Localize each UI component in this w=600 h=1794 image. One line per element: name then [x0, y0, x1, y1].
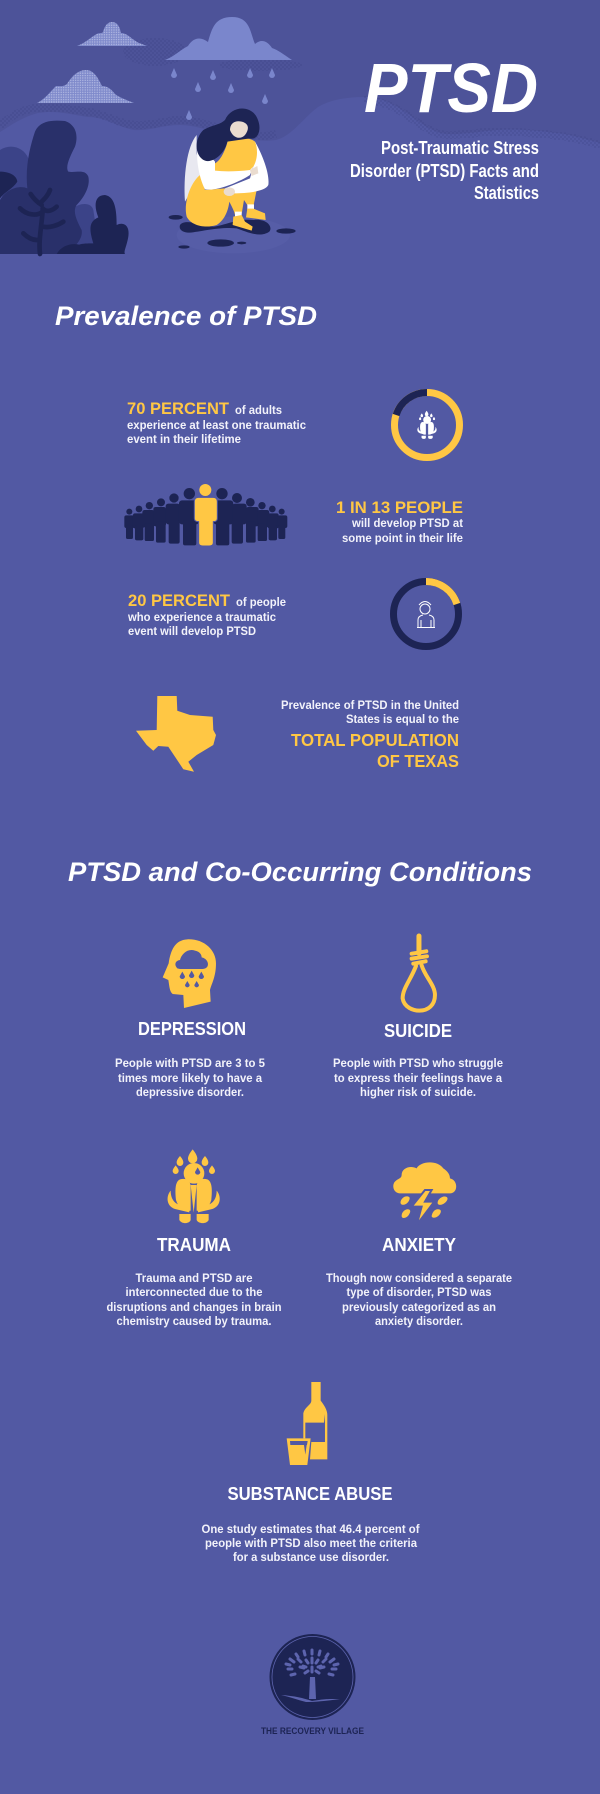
hill stipple [0, 107, 276, 135]
socks [235, 204, 254, 217]
heading: co-occurring conditions: PTSD and Co-Occurring Conditions [68, 857, 532, 887]
anxiety text: previously categorized as an [342, 1300, 496, 1314]
boots [233, 209, 266, 231]
anxiety text: anxiety disorder. [375, 1314, 463, 1328]
highlighted yellow person [194, 497, 217, 546]
depression text [115, 1056, 265, 1099]
icon: person outline [417, 602, 435, 628]
stat: 20 percent: of people [236, 595, 286, 609]
large rain cloud [165, 17, 292, 60]
front right leaf [68, 195, 129, 254]
dark crowd [124, 488, 287, 545]
stat: 70 percent: of adults [235, 403, 282, 417]
icon: brain white [417, 411, 437, 439]
shadow [180, 220, 270, 235]
back bush left [0, 147, 30, 197]
stat: 70 percent [127, 399, 306, 446]
stat: 20 percent: event will develop PTSD [128, 624, 256, 638]
leaf veins [20, 190, 63, 254]
stat: 20 percent: who experience a traumatic [127, 610, 276, 624]
hills backdrop [0, 0, 600, 143]
logo wordmark: THE RECOVERY VILLAGE [261, 1726, 364, 1737]
torso [215, 138, 257, 171]
trauma text [106, 1271, 282, 1328]
ground stipple [177, 217, 290, 253]
stat: 1 in 13 people [336, 498, 463, 545]
front left dark leaf [0, 172, 17, 198]
middle cloud [37, 70, 134, 103]
depression text: People with PTSD are 3 to 5 [115, 1056, 265, 1070]
face [230, 121, 248, 138]
icon: storm cloud [393, 1162, 456, 1225]
trauma text: chemistry caused by trauma. [116, 1314, 272, 1328]
logo [261, 1634, 364, 1737]
ground patches [169, 215, 296, 249]
small cloud [77, 22, 147, 46]
suicide text: People with PTSD who struggle [333, 1056, 503, 1070]
suicide text [333, 1056, 503, 1099]
trauma title: TRAUMA [157, 1235, 231, 1255]
suicide text: to express their feelings have a [334, 1071, 502, 1085]
header illustration [0, 0, 600, 254]
cloud stipple [123, 38, 187, 66]
donut: 70 percent [394, 392, 460, 458]
suicide text: higher risk of suicide. [360, 1085, 476, 1099]
yellow head [199, 484, 211, 496]
stat: 70 percent: experience at least one traumatic [127, 418, 306, 432]
sweater left [197, 143, 253, 190]
back bush right [63, 204, 100, 254]
icon: brain with drops [168, 1149, 220, 1223]
hands [250, 166, 258, 176]
subtitle: Statistics [474, 183, 539, 203]
depression text: depressive disorder. [136, 1085, 244, 1099]
ground bump [57, 244, 93, 254]
anxiety text: Though now considered a separate [326, 1271, 512, 1285]
panel: trauma [106, 1149, 282, 1328]
subtitle: Disorder (PTSD) Facts and [350, 161, 539, 181]
sweater right arm [225, 142, 269, 193]
icon: head with rain cloud [163, 939, 216, 1008]
anxiety text [326, 1271, 512, 1328]
sitting woman [169, 109, 296, 253]
substance text: for a substance use disorder. [233, 1550, 389, 1564]
icon: bottle and glass [287, 1382, 327, 1465]
cloud stipple right [218, 59, 302, 71]
lower hand [224, 187, 235, 196]
stat: 20 percent [127, 591, 286, 638]
rain drops [171, 68, 275, 120]
people crowd icon [124, 484, 287, 546]
stat: texas [281, 698, 459, 771]
back grey [185, 135, 201, 202]
stat: 20 percent: 20 PERCENT [128, 591, 231, 610]
stat: 1 in 13 people: will develop PTSD at [351, 516, 463, 530]
stat: 1 in 13 people: some point in their life [342, 531, 463, 545]
stat: texas: OF TEXAS [377, 751, 459, 771]
donut: 20 percent [394, 582, 458, 646]
stat: texas: States is equal to the [346, 712, 459, 726]
stat: texas: Prevalence of PTSD in the United [281, 698, 459, 712]
stat: 1 in 13 people: 1 IN 13 PEOPLE [336, 498, 463, 517]
stat: 70 percent: 70 PERCENT [127, 399, 230, 418]
substance text: One study estimates that 46.4 percent of [202, 1522, 420, 1536]
tree [281, 1650, 340, 1702]
tall leaf bush [0, 121, 89, 254]
bushes [0, 121, 129, 254]
substance text [202, 1522, 420, 1564]
substance title: SUBSTANCE ABUSE [228, 1484, 392, 1504]
panel: anxiety [326, 1162, 512, 1328]
stat: 70 percent: event in their lifetime [127, 432, 241, 446]
suicide title: SUICIDE [384, 1021, 452, 1041]
title: PTSD [364, 49, 538, 127]
anxiety text: type of disorder, PTSD was [346, 1285, 492, 1299]
substance text: people with PTSD also meet the criteria [205, 1536, 417, 1550]
depression title: DEPRESSION [138, 1019, 246, 1039]
panel: suicide [333, 936, 503, 1099]
stat: texas: TOTAL POPULATION [291, 730, 459, 750]
panel: depression [115, 939, 265, 1099]
hair [197, 109, 259, 161]
anxiety title: ANXIETY [382, 1235, 456, 1255]
trauma text: Trauma and PTSD are [136, 1271, 253, 1285]
icon: texas map [136, 696, 216, 772]
legs [186, 175, 257, 227]
heading: prevalence: Prevalence of PTSD [55, 301, 317, 331]
panel: substance abuse [202, 1382, 420, 1564]
icon: noose [403, 936, 435, 1011]
depression text: times more likely to have a [118, 1071, 262, 1085]
subtitle: Post-Traumatic Stress [381, 138, 539, 158]
trauma text: disruptions and changes in brain [106, 1300, 282, 1314]
hill stipple right [364, 100, 600, 145]
trauma text: interconnected due to the [126, 1285, 263, 1299]
subtitle [350, 138, 539, 203]
